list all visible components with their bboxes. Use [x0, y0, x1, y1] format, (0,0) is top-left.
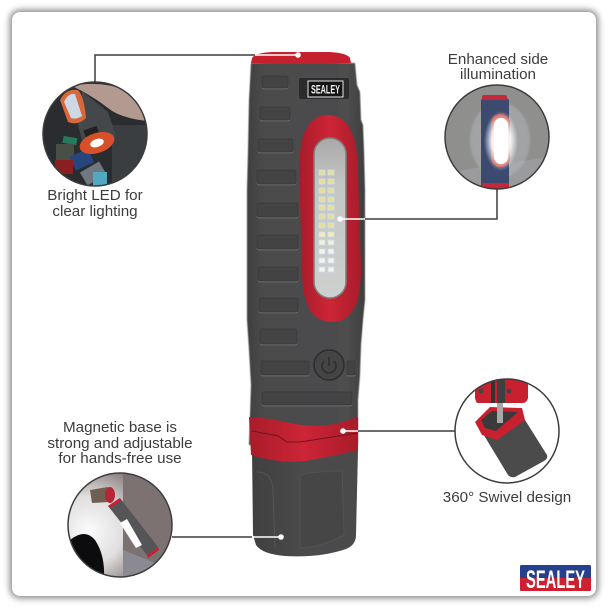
brand badge [299, 78, 349, 99]
label: enhanced side illumination: illumination [460, 66, 536, 83]
flashlight body [247, 63, 365, 445]
lamp window [314, 138, 346, 298]
label: magnetic base: for hands-free use [58, 450, 182, 467]
label: magnetic base: Magnetic base is [63, 419, 177, 436]
leader: LED end [95, 52, 301, 83]
circle photo: bright LED in engine bay [43, 82, 152, 187]
circle photo: swivel head [455, 378, 559, 483]
circle photo: side illumination [445, 85, 549, 190]
red lamp surround [299, 115, 361, 322]
flashlight product [247, 52, 365, 556]
leader: side illumination [337, 189, 497, 222]
circle photo: magnetic base on car [68, 473, 173, 577]
label: bright LED: Bright LED for [47, 187, 143, 204]
label: enhanced side illumination: Enhanced side [448, 51, 548, 68]
label: magnetic base: strong and adjustable [47, 435, 193, 452]
grip grooves [257, 76, 355, 405]
label: bright LED: clear lighting [52, 203, 138, 220]
leader: magnetic base [172, 534, 284, 540]
red top cap [251, 52, 351, 64]
leader: swivel [340, 428, 455, 434]
brand badge: SEALEY [311, 82, 340, 96]
label: swivel design: 360° Swivel design [443, 489, 571, 506]
LED array [319, 170, 334, 272]
base section [252, 450, 358, 556]
base panel relief [300, 471, 344, 548]
power button [314, 350, 344, 380]
red swivel band [249, 417, 358, 462]
swivel seam [252, 431, 358, 442]
